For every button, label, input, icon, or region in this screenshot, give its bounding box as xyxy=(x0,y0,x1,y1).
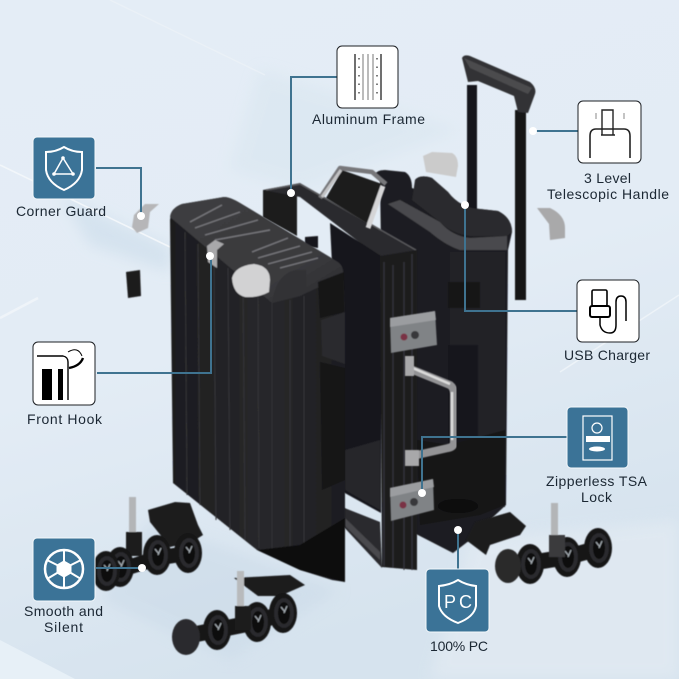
label line 2: Lock xyxy=(581,489,613,505)
label: Zipperless TSA xyxy=(546,473,648,489)
small guard on shell xyxy=(207,240,224,268)
callout lines xyxy=(96,77,578,569)
icon: handle xyxy=(590,110,630,158)
callout: corner guard xyxy=(16,137,106,219)
left wheel set xyxy=(92,497,203,591)
lower TSA lock xyxy=(390,479,434,521)
icon: wheel xyxy=(45,550,83,588)
callout: telescopic handle xyxy=(547,101,669,202)
top carry handle xyxy=(320,168,386,228)
right wheel set xyxy=(466,503,612,584)
label: 100% PC xyxy=(430,638,488,654)
back shell xyxy=(375,170,512,553)
label line 2: Telescopic Handle xyxy=(547,186,669,202)
label: USB Charger xyxy=(564,347,650,363)
loose corner guards xyxy=(126,152,565,298)
callout: front hook xyxy=(27,342,103,427)
label: Front Hook xyxy=(27,411,103,427)
callout: smooth and silent xyxy=(24,538,103,635)
icon: frame lines xyxy=(355,54,381,100)
label line 2: Silent xyxy=(44,619,83,635)
front shell xyxy=(170,197,345,582)
upper TSA lock xyxy=(390,311,437,353)
icon: PC shield: PC xyxy=(444,592,472,612)
telescopic handle xyxy=(462,55,535,300)
label: Aluminum Frame xyxy=(312,111,425,127)
icon: hook xyxy=(37,350,83,400)
icon: shield with triangle xyxy=(46,147,82,190)
icon: USB plug xyxy=(590,290,626,333)
aluminum frame xyxy=(263,183,417,570)
icon: lock xyxy=(583,416,612,460)
corner guard on shell xyxy=(232,264,270,297)
shell ribs xyxy=(185,232,304,568)
callout: aluminum frame xyxy=(312,46,425,127)
callout: 100% PC xyxy=(426,569,489,654)
label: Smooth and xyxy=(24,603,103,619)
top ribs xyxy=(190,205,318,268)
dark rounded corner of shell xyxy=(272,270,306,303)
callout: zipperless TSA lock xyxy=(546,407,648,505)
callout dots xyxy=(137,127,537,572)
label: 3 Level xyxy=(584,170,631,186)
top face of front shell xyxy=(170,197,343,303)
label: Corner Guard xyxy=(16,203,106,219)
side carry handle xyxy=(405,356,454,466)
center wheel set xyxy=(172,571,305,655)
callout: USB charger xyxy=(564,280,650,363)
